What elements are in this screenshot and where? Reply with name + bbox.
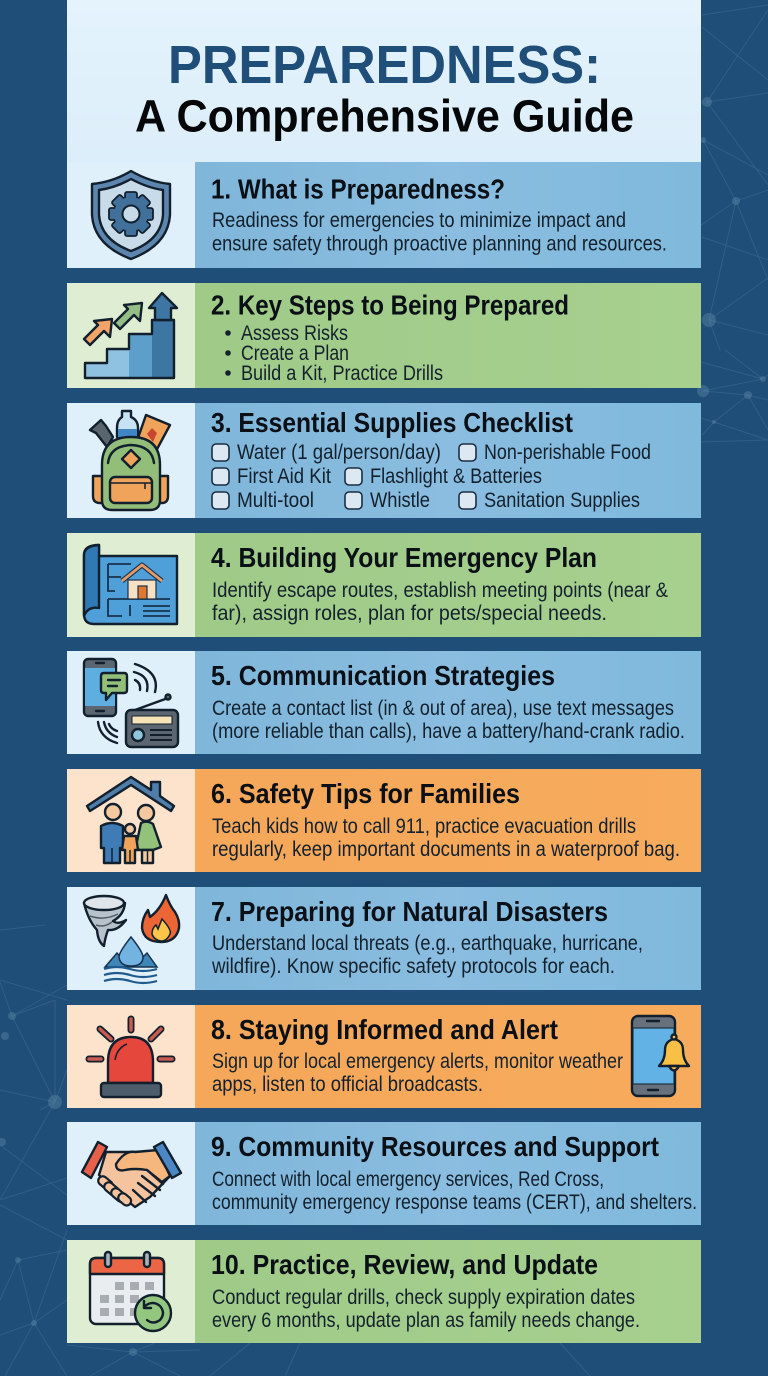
description: far), assign roles, plan for pets/special needs. bbox=[212, 602, 607, 625]
panel 10: Practice bbox=[67, 1240, 701, 1343]
panel 1: What is Preparedness bbox=[67, 162, 701, 268]
heading: 1. What is Preparedness? bbox=[211, 174, 505, 204]
icon: phone and radio bbox=[84, 659, 178, 747]
heading: 5. Communication Strategies bbox=[211, 660, 555, 691]
panel 7: Natural Disasters bbox=[67, 887, 701, 990]
description: Create a contact list (in & out of area), use text messages bbox=[212, 697, 674, 720]
description bbox=[212, 697, 685, 743]
checklist: Whistle bbox=[370, 489, 430, 512]
panel 9: Community bbox=[67, 1122, 701, 1225]
description bbox=[212, 1168, 697, 1214]
icon: shield with gear bbox=[92, 171, 170, 259]
panel 2: Key Steps bbox=[67, 283, 701, 388]
icon: backpack bbox=[90, 411, 170, 510]
checklist: Water (1 gal/person/day) bbox=[237, 441, 441, 464]
checklist: Flashlight & Batteries bbox=[370, 465, 542, 488]
heading: 3. Essential Supplies Checklist bbox=[211, 407, 573, 438]
checklist: First Aid Kit bbox=[237, 465, 331, 488]
icon: calendar with refresh bbox=[90, 1252, 171, 1331]
panel 4: Emergency Plan bbox=[67, 533, 701, 637]
description: apps, listen to official broadcasts. bbox=[212, 1073, 483, 1096]
description: Connect with local emergency services, Red Cross, bbox=[212, 1168, 604, 1191]
bullet list: Create a Plan bbox=[241, 342, 349, 365]
checklist: Multi-tool bbox=[237, 489, 314, 512]
panel 8: Staying Informed bbox=[67, 1005, 701, 1108]
description: ensure safety through proactive planning and resources. bbox=[212, 232, 667, 256]
panel 6: Family Safety bbox=[67, 769, 701, 872]
heading: 4. Building Your Emergency Plan bbox=[211, 542, 597, 573]
icon: house blueprint bbox=[84, 545, 177, 624]
description: Understand local threats (e.g., earthquake, hurricane, bbox=[212, 932, 643, 955]
description bbox=[212, 815, 680, 861]
checklist: Sanitation Supplies bbox=[484, 489, 640, 512]
icon: stairs and arrows bbox=[84, 293, 177, 378]
heading: 9. Community Resources and Support bbox=[211, 1131, 659, 1162]
icon: handshake bbox=[82, 1142, 181, 1207]
checklist bbox=[212, 441, 651, 512]
heading: 7. Preparing for Natural Disasters bbox=[211, 896, 608, 927]
bullet list bbox=[225, 322, 443, 385]
description: wildfire). Know specific safety protocols for each. bbox=[211, 955, 615, 978]
heading: 6. Safety Tips for Families bbox=[211, 778, 520, 809]
icon: family under roof bbox=[87, 777, 174, 863]
description bbox=[212, 1286, 640, 1332]
description: Teach kids how to call 911, practice evacuation drills bbox=[212, 815, 636, 838]
heading: 10. Practice, Review, and Update bbox=[211, 1249, 598, 1280]
bullet list: Assess Risks bbox=[241, 322, 348, 345]
heading: 2. Key Steps to Being Prepared bbox=[211, 290, 569, 320]
description bbox=[211, 932, 643, 978]
panel 3: Supplies bbox=[67, 403, 701, 518]
description: Readiness for emergencies to minimize impact and bbox=[212, 209, 626, 232]
subtitle: A Comprehensive Guide bbox=[135, 90, 634, 142]
icon: phone with bell bbox=[632, 1016, 689, 1096]
icon: tornado, fire, flood bbox=[84, 895, 179, 983]
heading: 8. Staying Informed and Alert bbox=[211, 1014, 558, 1045]
bullet list: Build a Kit, Practice Drills bbox=[241, 362, 443, 385]
description: Conduct regular drills, check supply expiration dates bbox=[212, 1286, 635, 1309]
title: Preparedness: PREPAREDNESS: bbox=[168, 35, 601, 95]
description: (more reliable than calls), have a battery/hand-crank radio. bbox=[212, 720, 685, 743]
description bbox=[212, 209, 667, 256]
description bbox=[212, 579, 668, 625]
checklist: Non-perishable Food bbox=[484, 441, 651, 464]
title panel bbox=[67, 0, 701, 162]
panel 5: Communication bbox=[67, 651, 701, 754]
description: every 6 months, update plan as family needs change. bbox=[212, 1309, 640, 1332]
description: regularly, keep important documents in a waterproof bag. bbox=[212, 838, 680, 861]
description: Identify escape routes, establish meeting points (near & bbox=[212, 579, 668, 602]
description bbox=[212, 1050, 623, 1096]
icon: alarm siren bbox=[89, 1019, 172, 1097]
description: Sign up for local emergency alerts, monitor weather bbox=[212, 1050, 623, 1073]
